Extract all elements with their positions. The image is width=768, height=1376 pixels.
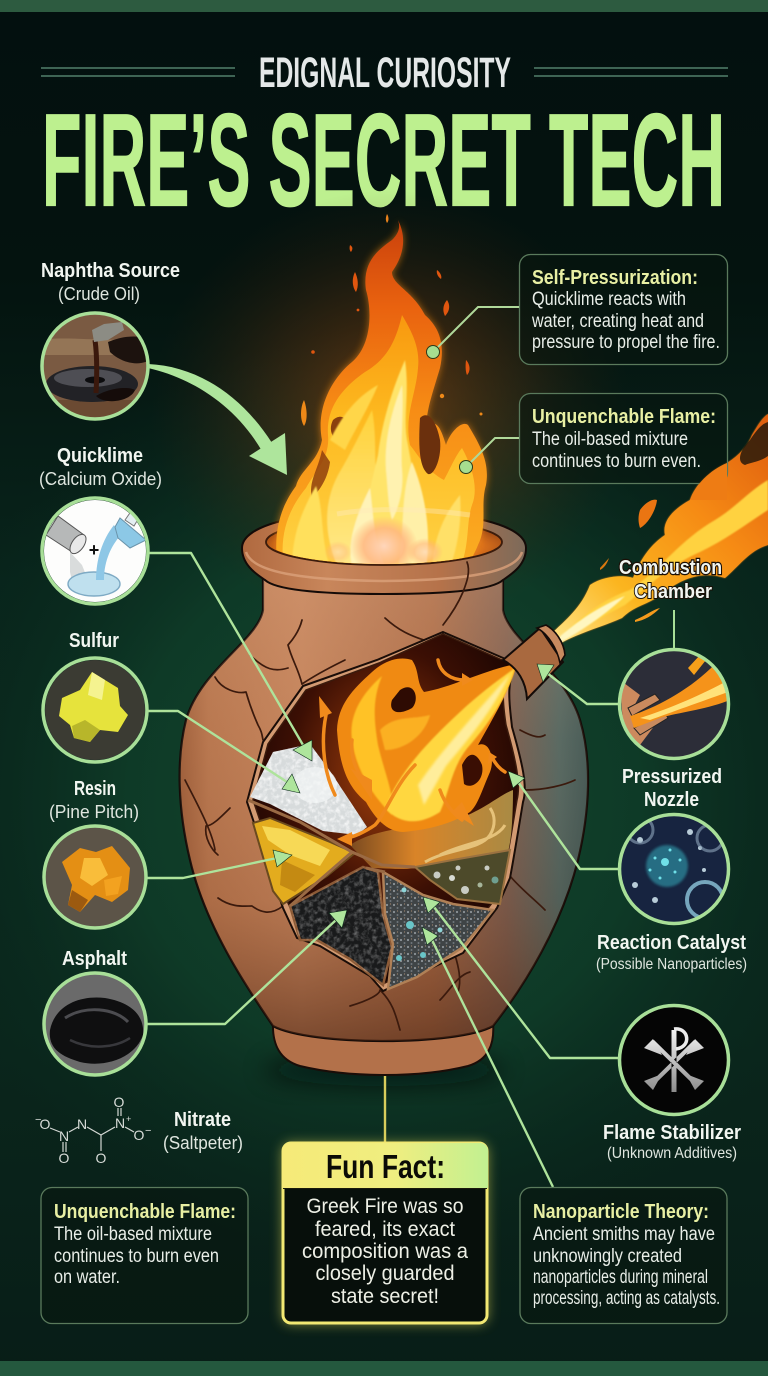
panel: unquenchable flame lower: Unquenchable Flame:: [54, 1201, 236, 1223]
panel: unquenchable flame lower: continues to burn even: [54, 1246, 219, 1267]
panel: nanoparticle theory: Nanoparticle Theory:: [533, 1201, 709, 1223]
connector: sulfur: [147, 711, 300, 793]
callout: unquenchable flame upper: [460, 394, 728, 484]
ingredient: resin: (Pine Pitch): [49, 802, 139, 822]
label: nitrate: Nitrate: [174, 1109, 231, 1131]
component: flame stabilizer chi-rho: Flame Stabilizer: [603, 1122, 741, 1144]
main flame: [276, 220, 487, 576]
connector: quicklime: [148, 553, 312, 761]
component: reaction catalyst: [596, 932, 747, 973]
molten swirls: [425, 808, 505, 862]
ingredient: quicklime: Quicklime: [57, 445, 143, 467]
connector: combustion chamber: [673, 610, 675, 650]
ingredient: nitrate molecule: O: [134, 1127, 145, 1143]
embers: [301, 214, 482, 426]
olive bubble layer: [415, 850, 510, 904]
ingredient: nitrate molecule: −: [145, 1125, 151, 1137]
component: flame stabilizer chi-rho: (Unknown Additives): [607, 1145, 737, 1162]
component: pressurized nozzle: Nozzle: [644, 789, 699, 811]
ingredient: nitrate molecule: O: [114, 1094, 125, 1110]
ingredient: resin: Resin: [74, 778, 116, 800]
flame dark gaps: [330, 416, 344, 436]
ingredient: nitrate molecule: O: [96, 1150, 107, 1166]
flame yellow tongues: [292, 360, 461, 568]
cracks on shell: [185, 562, 575, 1030]
ingredient: nitrate molecule: −: [35, 1114, 41, 1126]
connector: fun fact stem: [384, 1076, 386, 1143]
connector: catalyst: [508, 771, 620, 869]
panel: unquenchable flame lower: The oil-based mixture: [54, 1224, 212, 1245]
ingredient: sulfur: [43, 630, 147, 762]
jet flame from nozzle: [545, 414, 768, 650]
label: nitrate: [163, 1109, 243, 1153]
label: nitrate: (Saltpeter): [163, 1133, 243, 1153]
ingredient: asphalt: Asphalt: [62, 948, 127, 970]
callout: self-pressurization: water, creating heat and: [531, 311, 704, 332]
ingredient: quicklime: [39, 445, 162, 604]
yellow resin chunk: [253, 818, 355, 904]
panel: nanoparticle theory: [520, 1188, 727, 1324]
rim lip highlight: [246, 552, 522, 581]
connector: naphtha curved arrow: [148, 364, 287, 475]
ingredient: nitrate molecule: O: [40, 1116, 51, 1132]
panel: fun fact: Greek Fire was so: [306, 1195, 464, 1218]
bottom band: [0, 1361, 768, 1376]
rim back and mouth: [242, 511, 526, 594]
component: combustion chamber: [619, 557, 730, 758]
panel: fun fact: state secret!: [331, 1285, 439, 1308]
jet flame overlap on callout corner: [690, 463, 727, 500]
panel: unquenchable flame lower: on water.: [54, 1267, 120, 1288]
panel: nanoparticle theory: nanoparticles during mineral: [533, 1267, 708, 1288]
panel: fun fact: Fun Fact:: [326, 1148, 445, 1185]
top band: [0, 0, 768, 12]
clay vase: [180, 511, 588, 1086]
connector: nozzle: [537, 664, 620, 704]
ingredient: naphtha: [40, 260, 180, 425]
component: combustion chamber: Combustion: [619, 557, 722, 579]
connector: nanoparticle theory: [422, 927, 553, 1187]
nanoparticle mineral: [383, 872, 493, 989]
component: flame stabilizer chi-rho: [603, 1006, 741, 1162]
broken shell edge: [247, 632, 525, 991]
panel: fun fact: closely guarded: [316, 1262, 454, 1285]
ingredient: sulfur: Sulfur: [69, 630, 119, 652]
panel: nanoparticle theory: Ancient smiths may have: [533, 1224, 715, 1245]
callout: unquenchable flame upper: continues to burn even.: [532, 451, 701, 472]
vase body: [180, 575, 588, 1041]
ingredient: nitrate molecule: [35, 1094, 151, 1166]
component: reaction catalyst: Reaction Catalyst: [597, 932, 746, 954]
ingredient: nitrate molecule: N: [59, 1128, 69, 1144]
flame pocket: [462, 755, 482, 786]
panel: nanoparticle theory: unknowingly created: [533, 1246, 682, 1267]
ingredient: naphtha: (Crude Oil): [58, 284, 140, 304]
ingredient: nitrate molecule: O: [59, 1150, 70, 1166]
ingredient: naphtha: Naphtha Source: [41, 260, 180, 282]
vessel interior materials: [248, 658, 517, 989]
subtitle: EDIGNAL CURIOSITY: [259, 49, 511, 97]
panel: fun fact: feared, its exact: [315, 1218, 455, 1241]
connector: resin: [146, 850, 292, 878]
interior flow arrows: [319, 660, 505, 846]
connector: stabilizer: [423, 897, 620, 1058]
component: pressurized nozzle: Pressurized: [622, 766, 722, 788]
ingredient: nitrate molecule: N: [77, 1116, 87, 1132]
component: reaction catalyst: (Possible Nanoparticles): [596, 956, 747, 973]
ingredient: asphalt: [44, 948, 146, 1075]
panel: fun fact: [282, 1143, 488, 1324]
fire glow: [150, 190, 630, 630]
callout: unquenchable flame upper: The oil-based mixture: [532, 429, 688, 450]
white quicklime pile: [250, 744, 367, 835]
subtitle rules: [41, 68, 728, 76]
callout: self-pressurization: Self-Pressurization:: [532, 267, 698, 289]
ingredient: nitrate molecule: N: [115, 1115, 125, 1131]
callout: self-pressurization: Quicklime reacts with: [532, 289, 686, 310]
back rim seen through flame: [337, 510, 470, 515]
panel: fun fact: composition was a: [302, 1240, 468, 1263]
connector: asphalt: [146, 910, 347, 1024]
ingredient: nitrate molecule: +: [126, 1114, 131, 1124]
component: combustion chamber: Chamber: [634, 581, 712, 603]
interior cavity: [253, 634, 518, 983]
rim inner: [266, 519, 502, 565]
ingredient: resin: [44, 778, 146, 928]
black asphalt: [290, 867, 392, 985]
component: pressurized nozzle: [620, 766, 728, 924]
vase foot: [273, 1022, 493, 1075]
interior flame: [337, 658, 517, 832]
vase shading: [180, 575, 588, 1041]
pot dividers: [248, 800, 415, 906]
ingredient: quicklime: (Calcium Oxide): [39, 469, 162, 489]
callout: self-pressurization: pressure to propel the fire.: [532, 332, 720, 353]
molten pool: [350, 790, 513, 869]
nozzle pipe: [503, 625, 565, 699]
callout: unquenchable flame upper: Unquenchable Flame:: [532, 406, 716, 428]
ingredient: quicklime: +: [89, 540, 99, 560]
callout: self-pressurization: [426, 254, 728, 364]
vase ground shadow: [264, 1054, 504, 1086]
panel: unquenchable flame lower: [41, 1188, 248, 1324]
